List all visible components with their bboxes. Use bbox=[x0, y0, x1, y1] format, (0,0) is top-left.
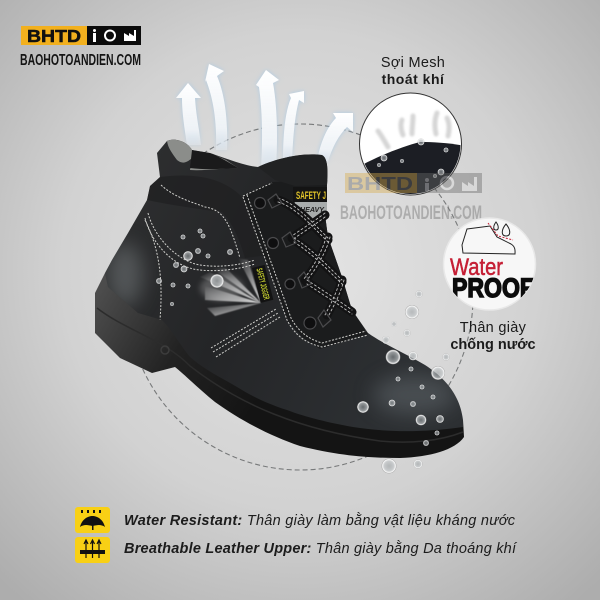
waterproof caption: chống nước bbox=[450, 337, 536, 353]
waterproof badge: Water bbox=[450, 254, 503, 281]
safety boot: SAFETY JOGGER bbox=[254, 267, 272, 301]
toe highlight bbox=[373, 375, 457, 415]
logo bbox=[20, 26, 141, 69]
dashed circle bbox=[127, 124, 473, 470]
boot outline icon bbox=[462, 226, 515, 254]
drop icons bbox=[494, 222, 510, 236]
mesh caption: thoát khí bbox=[382, 71, 445, 87]
safety boot bbox=[95, 140, 464, 458]
watermark bbox=[340, 173, 482, 224]
upper leather bbox=[105, 140, 463, 431]
side label bbox=[252, 265, 273, 303]
waterproof caption: Thân giày bbox=[460, 320, 527, 336]
midsole ridge bbox=[97, 308, 463, 442]
top label: SAFETY J bbox=[296, 190, 326, 202]
eyelets bbox=[254, 194, 331, 329]
waterproof caption bbox=[450, 320, 536, 353]
arrow 4 bbox=[283, 91, 304, 162]
icon: umbrella bbox=[75, 507, 110, 533]
stitching bbox=[145, 183, 368, 357]
logo: BHTD bbox=[27, 26, 81, 46]
icon: breathable bbox=[75, 537, 110, 563]
logo: BAOHOTOANDIEN.COM bbox=[20, 52, 141, 69]
watermark: BAOHOTOANDIEN.COM bbox=[340, 203, 482, 224]
top label bbox=[293, 187, 327, 220]
arrow 1 bbox=[176, 83, 201, 145]
heel highlight bbox=[107, 243, 143, 307]
lace facing bbox=[243, 180, 368, 349]
waterproof badge: PROOF bbox=[452, 273, 534, 303]
air arrows bbox=[176, 64, 353, 168]
arrow 3 bbox=[256, 70, 279, 168]
feature: water resistant: Water Resistant: Thân giày làm bằng vật liệu kháng nước bbox=[124, 512, 516, 529]
tongue bbox=[258, 154, 327, 186]
collar lining bbox=[167, 140, 238, 170]
collar dark panel bbox=[147, 176, 205, 208]
mesh circle bbox=[360, 93, 465, 200]
feature: breathable leather: Breathable Leather Upper: Thân giày bằng Da thoáng khí bbox=[124, 540, 518, 557]
waterproof badge bbox=[444, 218, 536, 310]
water droplets bbox=[156, 228, 450, 474]
arrow 5 bbox=[317, 113, 353, 162]
side water burst bbox=[200, 258, 261, 316]
mesh caption: Sợi Mesh bbox=[381, 55, 445, 71]
watermark: BHTD bbox=[347, 174, 413, 194]
mesh caption bbox=[381, 55, 445, 87]
top label: HEAVY bbox=[300, 207, 325, 214]
outsole bbox=[95, 273, 464, 458]
arrow 2 bbox=[205, 64, 227, 150]
laces bbox=[278, 198, 352, 315]
